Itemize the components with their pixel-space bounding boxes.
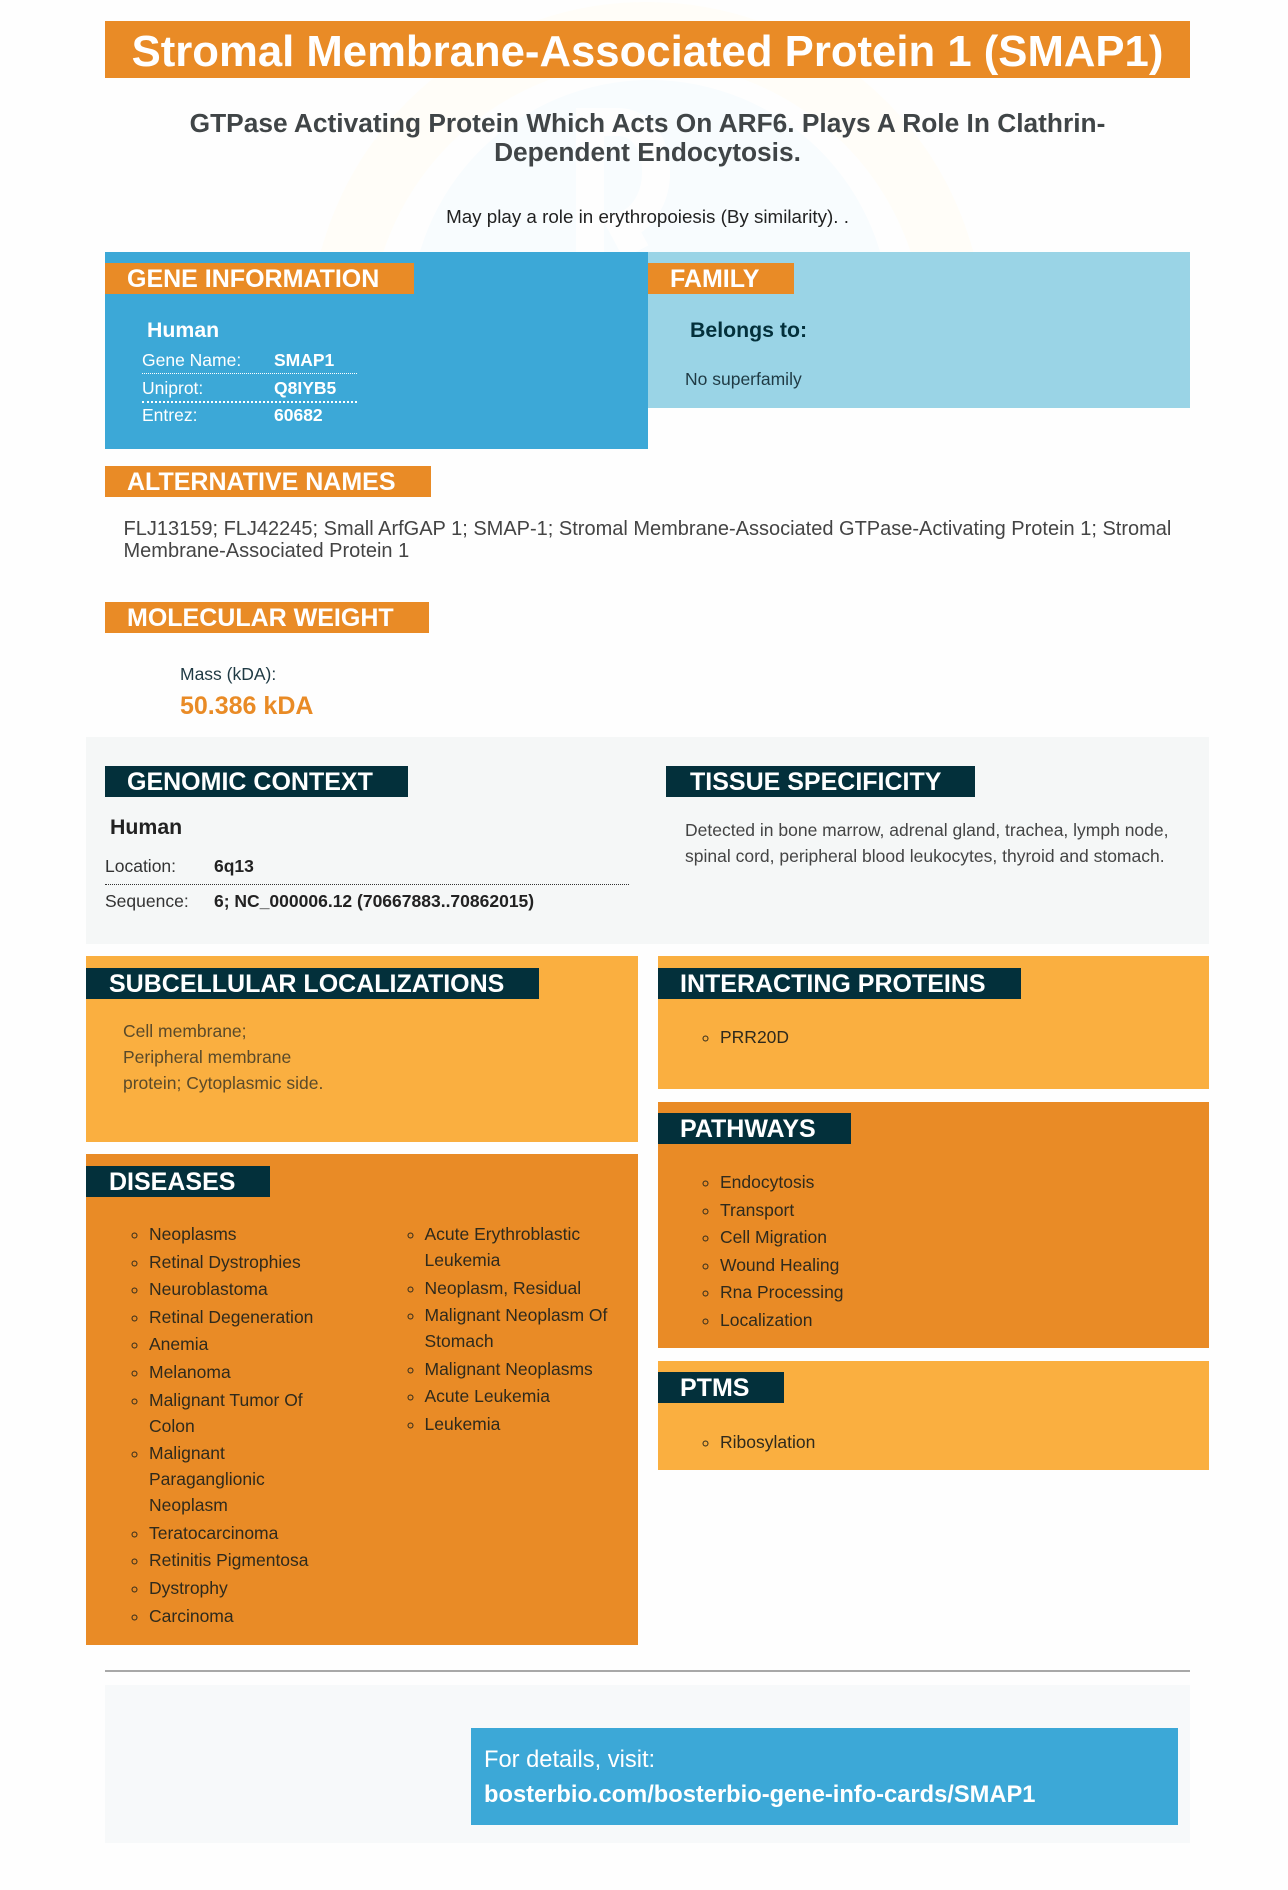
tissue specificity text: Detected in bone marrow, adrenal gland, trachea, lymph node, <box>685 820 1168 840</box>
heading: genomic context: GENOMIC CONTEXT <box>127 768 373 796</box>
ptms list: Ribosylation <box>720 1432 815 1452</box>
diseases list column 2 <box>408 1224 608 1434</box>
diseases list column 1: Dystrophy <box>149 1578 228 1598</box>
pathways list: Transport <box>720 1200 794 1220</box>
pathways list <box>702 1172 844 1330</box>
heading: family <box>648 263 794 294</box>
species label: Human <box>110 815 182 839</box>
heading: ptms <box>658 1372 784 1403</box>
heading: ptms: PTMS <box>680 1374 749 1402</box>
diseases list column 1: Neoplasms <box>149 1224 237 1244</box>
heading: gene information: GENE INFORMATION <box>127 265 379 293</box>
diseases list column 1: Teratocarcinoma <box>149 1523 278 1543</box>
diseases list column 1: Retinal Dystrophies <box>149 1252 301 1272</box>
pathways list: Endocytosis <box>720 1172 814 1192</box>
diseases list column 1: Malignant <box>149 1443 225 1463</box>
tissue specificity text: spinal cord, peripheral blood leukocytes, thyroid and stomach. <box>685 846 1165 866</box>
subcellular text <box>123 1021 323 1093</box>
species label: Human <box>147 318 219 342</box>
diseases list column 1: Carcinoma <box>149 1606 234 1626</box>
pathways list: Wound Healing <box>720 1255 839 1275</box>
gene name row: Gene Name: <box>142 350 241 370</box>
interacting proteins list: PRR20D <box>720 1027 789 1047</box>
pathways list: Rna Processing <box>720 1282 844 1302</box>
gene name row: SMAP1 <box>274 350 334 370</box>
heading: diseases <box>86 1166 270 1197</box>
callout: details link <box>471 1728 1178 1825</box>
heading: tissue specificity: TISSUE SPECIFICITY <box>690 768 941 796</box>
entrez row: Entrez: <box>142 405 197 425</box>
description: May play a role in erythropoiesis (By similarity). . <box>446 206 849 227</box>
uniprot row <box>142 375 357 403</box>
diseases list column 2: Leukemia <box>424 1250 500 1270</box>
diseases list column 2: Leukemia <box>424 1414 500 1434</box>
subcellular text: Peripheral membrane <box>123 1047 291 1067</box>
tissue specificity text <box>685 820 1168 866</box>
heading: alternative names: ALTERNATIVE NAMES <box>127 468 396 496</box>
panel: pathways <box>658 1102 1209 1348</box>
subcellular text: protein; Cytoplasmic side. <box>123 1073 323 1093</box>
mass value: 50.386 kDA <box>180 692 313 720</box>
uniprot row: Uniprot: <box>142 378 203 398</box>
heading: interacting proteins: INTERACTING PROTEINS <box>680 970 986 998</box>
diseases list column 1: Melanoma <box>149 1362 231 1382</box>
sequence row: 6; NC_000006.12 (70667883..70862015) <box>214 891 534 911</box>
panel: subcellular localizations <box>86 956 638 1142</box>
diseases list column 1: Neoplasm <box>149 1495 228 1515</box>
entrez row: 60682 <box>274 405 323 425</box>
entrez row <box>142 405 323 425</box>
diseases list column 2: Acute Erythroblastic <box>424 1224 580 1244</box>
panel: family <box>648 252 1190 408</box>
panel: footer <box>105 1685 1190 1843</box>
panel: diseases <box>86 1154 638 1645</box>
alternative names text: FLJ13159; FLJ42245; Small ArfGAP 1; SMAP-1; Stromal Membrane-Associated GTPase-Activating Protein 1; Stromal <box>124 518 1171 540</box>
pathways list: Cell Migration <box>720 1227 827 1247</box>
diseases list column 2: Malignant Neoplasm Of <box>424 1305 607 1325</box>
diseases list column 1: Paraganglionic <box>149 1469 265 1489</box>
diseases list column 1: Retinitis Pigmentosa <box>149 1550 309 1570</box>
diseases list column 1: Neuroblastoma <box>149 1279 268 1299</box>
subtitle: GTPase Activating Protein Which Acts On ARF6. Plays A Role In Clathrin- <box>190 108 1105 138</box>
uniprot row: Q8IYB5 <box>274 378 336 398</box>
diseases list column 1: Malignant Tumor Of <box>149 1390 303 1410</box>
subtitle: Dependent Endocytosis. <box>494 137 801 167</box>
heading: molecular weight: MOLECULAR WEIGHT <box>127 604 394 632</box>
sequence row: Sequence: <box>105 891 189 911</box>
alternative names text: Membrane-Associated Protein 1 <box>124 540 409 562</box>
callout label: For details, visit: <box>484 1747 655 1773</box>
panel: interacting proteins <box>658 956 1209 1089</box>
footer divider <box>105 1670 1190 1672</box>
location row: Location: <box>105 856 176 876</box>
location row <box>105 853 629 885</box>
callout url: bosterbio.com/bosterbio-gene-info-cards/SMAP1 <box>484 1782 1035 1808</box>
watermark logo <box>0 0 1288 252</box>
gene name row <box>142 347 357 374</box>
heading: pathways <box>658 1113 851 1144</box>
family value: No superfamily <box>685 369 802 389</box>
alternative names text <box>124 518 1171 562</box>
subtitle <box>190 108 1105 167</box>
belongs to label: Belongs to: <box>690 318 807 342</box>
diseases list column 1: Retinal Degeneration <box>149 1307 313 1327</box>
panel: genomic context and tissue specificity <box>86 737 1209 944</box>
diseases list column 2: Stomach <box>424 1331 494 1351</box>
diseases list column 1: Anemia <box>149 1334 208 1354</box>
panel: ptms <box>658 1361 1209 1470</box>
title banner: Stromal Membrane-Associated Protein 1 (SMAP1) <box>132 27 1163 76</box>
diseases list column 1 <box>132 1224 313 1626</box>
heading: diseases: DISEASES <box>109 1168 235 1196</box>
pathways list: Localization <box>720 1310 812 1330</box>
mass label: Mass (kDA): <box>180 664 276 684</box>
heading: family: FAMILY <box>670 265 759 293</box>
diseases list column 2: Neoplasm, Residual <box>424 1278 581 1298</box>
heading: pathways: PATHWAYS <box>680 1115 816 1143</box>
diseases list column 2: Acute Leukemia <box>424 1386 550 1406</box>
location row: 6q13 <box>214 856 254 876</box>
panel: gene information <box>105 252 648 449</box>
diseases list column 1: Colon <box>149 1416 195 1436</box>
subcellular text: Cell membrane; <box>123 1021 247 1041</box>
heading: subcellular localizations: SUBCELLULAR LOCALIZATIONS <box>109 970 504 998</box>
diseases list column 2: Malignant Neoplasms <box>424 1359 593 1379</box>
